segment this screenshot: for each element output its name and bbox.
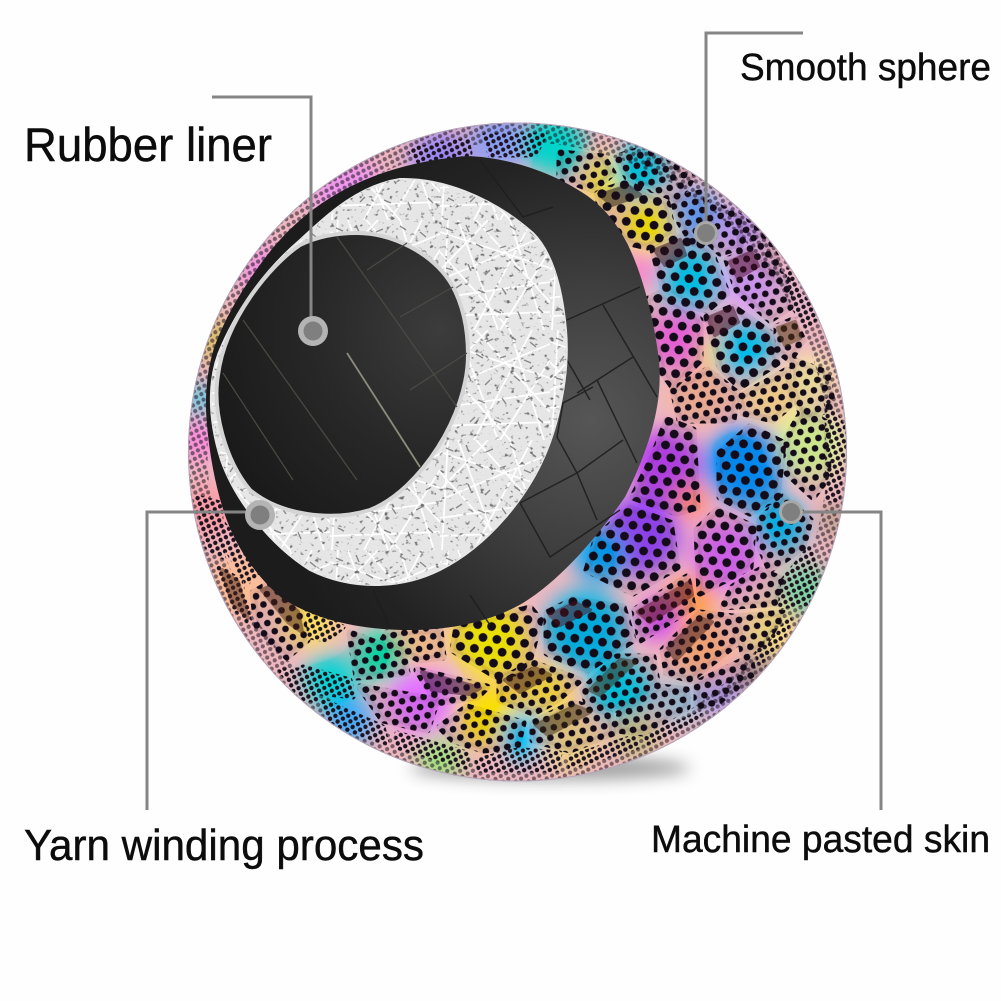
label: Smooth sphere: Smooth sphere [740, 47, 991, 89]
callout: smooth sphere leader [694, 33, 803, 245]
callout: yarn winding leader [147, 500, 275, 810]
ground shadow [410, 756, 690, 780]
black layer panel seams [373, 160, 657, 627]
callout: machine pasted skin leader [779, 500, 881, 810]
ball outline [188, 123, 846, 781]
large perforated panels [453, 183, 783, 677]
dark merged-dot patches [222, 186, 800, 735]
fine edge dots [198, 132, 838, 772]
label: Rubber liner: Rubber liner [24, 118, 272, 171]
holographic skin [180, 112, 860, 795]
label: Yarn winding process: Yarn winding process [24, 821, 424, 870]
rubber liner core [217, 233, 468, 516]
callout: rubber liner leader [212, 97, 328, 346]
rubber liner seams [223, 237, 467, 480]
compressed edge panels [197, 135, 845, 770]
label: Machine pasted skin: Machine pasted skin [651, 819, 990, 861]
skin colour field [180, 112, 860, 795]
black inner layer [206, 156, 660, 630]
white yarn winding layer [211, 179, 567, 585]
medium perforated panels [253, 150, 833, 750]
ball cutaway illustration [180, 112, 860, 795]
